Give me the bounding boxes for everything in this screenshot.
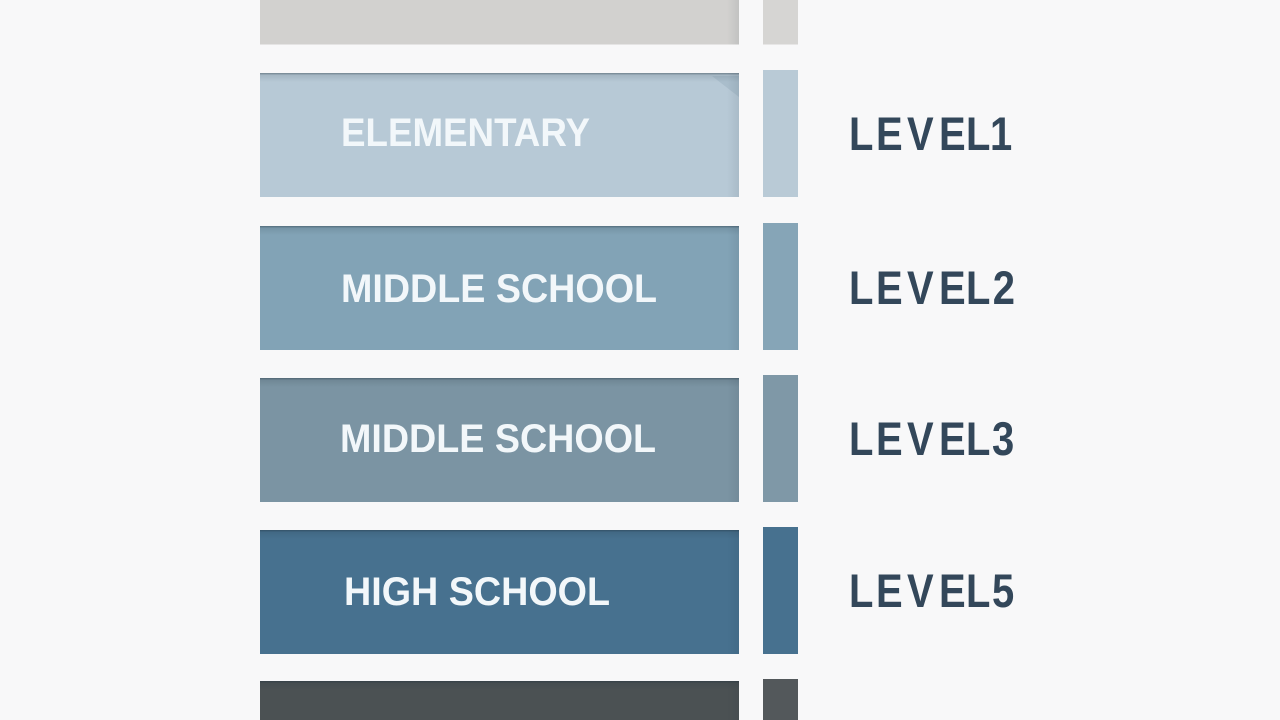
bar: elementary: ELEMENTARY — [341, 111, 590, 155]
bar: high school: HIGH SCHOOL — [344, 570, 610, 614]
swatch: level 3 — [763, 375, 798, 502]
bar: middle school: MIDDLE SCHOOL — [341, 267, 657, 311]
label: level 5: LE VEL5 — [849, 566, 1014, 618]
bar: middle school — [260, 378, 739, 502]
row: top grey bar — [260, 0, 798, 44]
row: middle school, level 2 — [260, 223, 1015, 350]
label: level 3: LE VEL3 — [849, 414, 1014, 466]
row: high school, level 5 — [260, 527, 1014, 654]
row: middle school, level 3 — [260, 375, 1014, 502]
bar: elementary — [260, 73, 739, 197]
swatch: level 1 — [763, 70, 798, 197]
row: bottom dark bar — [260, 679, 798, 720]
label: level 2: LE VEL2 — [849, 263, 1015, 315]
swatch: level 2 — [763, 223, 798, 350]
label: level 1: LE VEL1 — [849, 109, 1012, 161]
swatch: level 5 — [763, 527, 798, 654]
row: elementary, level 1 — [260, 70, 1012, 197]
bar: middle school — [260, 226, 739, 350]
bar: middle school: MIDDLE SCHOOL — [340, 417, 656, 461]
bar: high school — [260, 530, 739, 654]
